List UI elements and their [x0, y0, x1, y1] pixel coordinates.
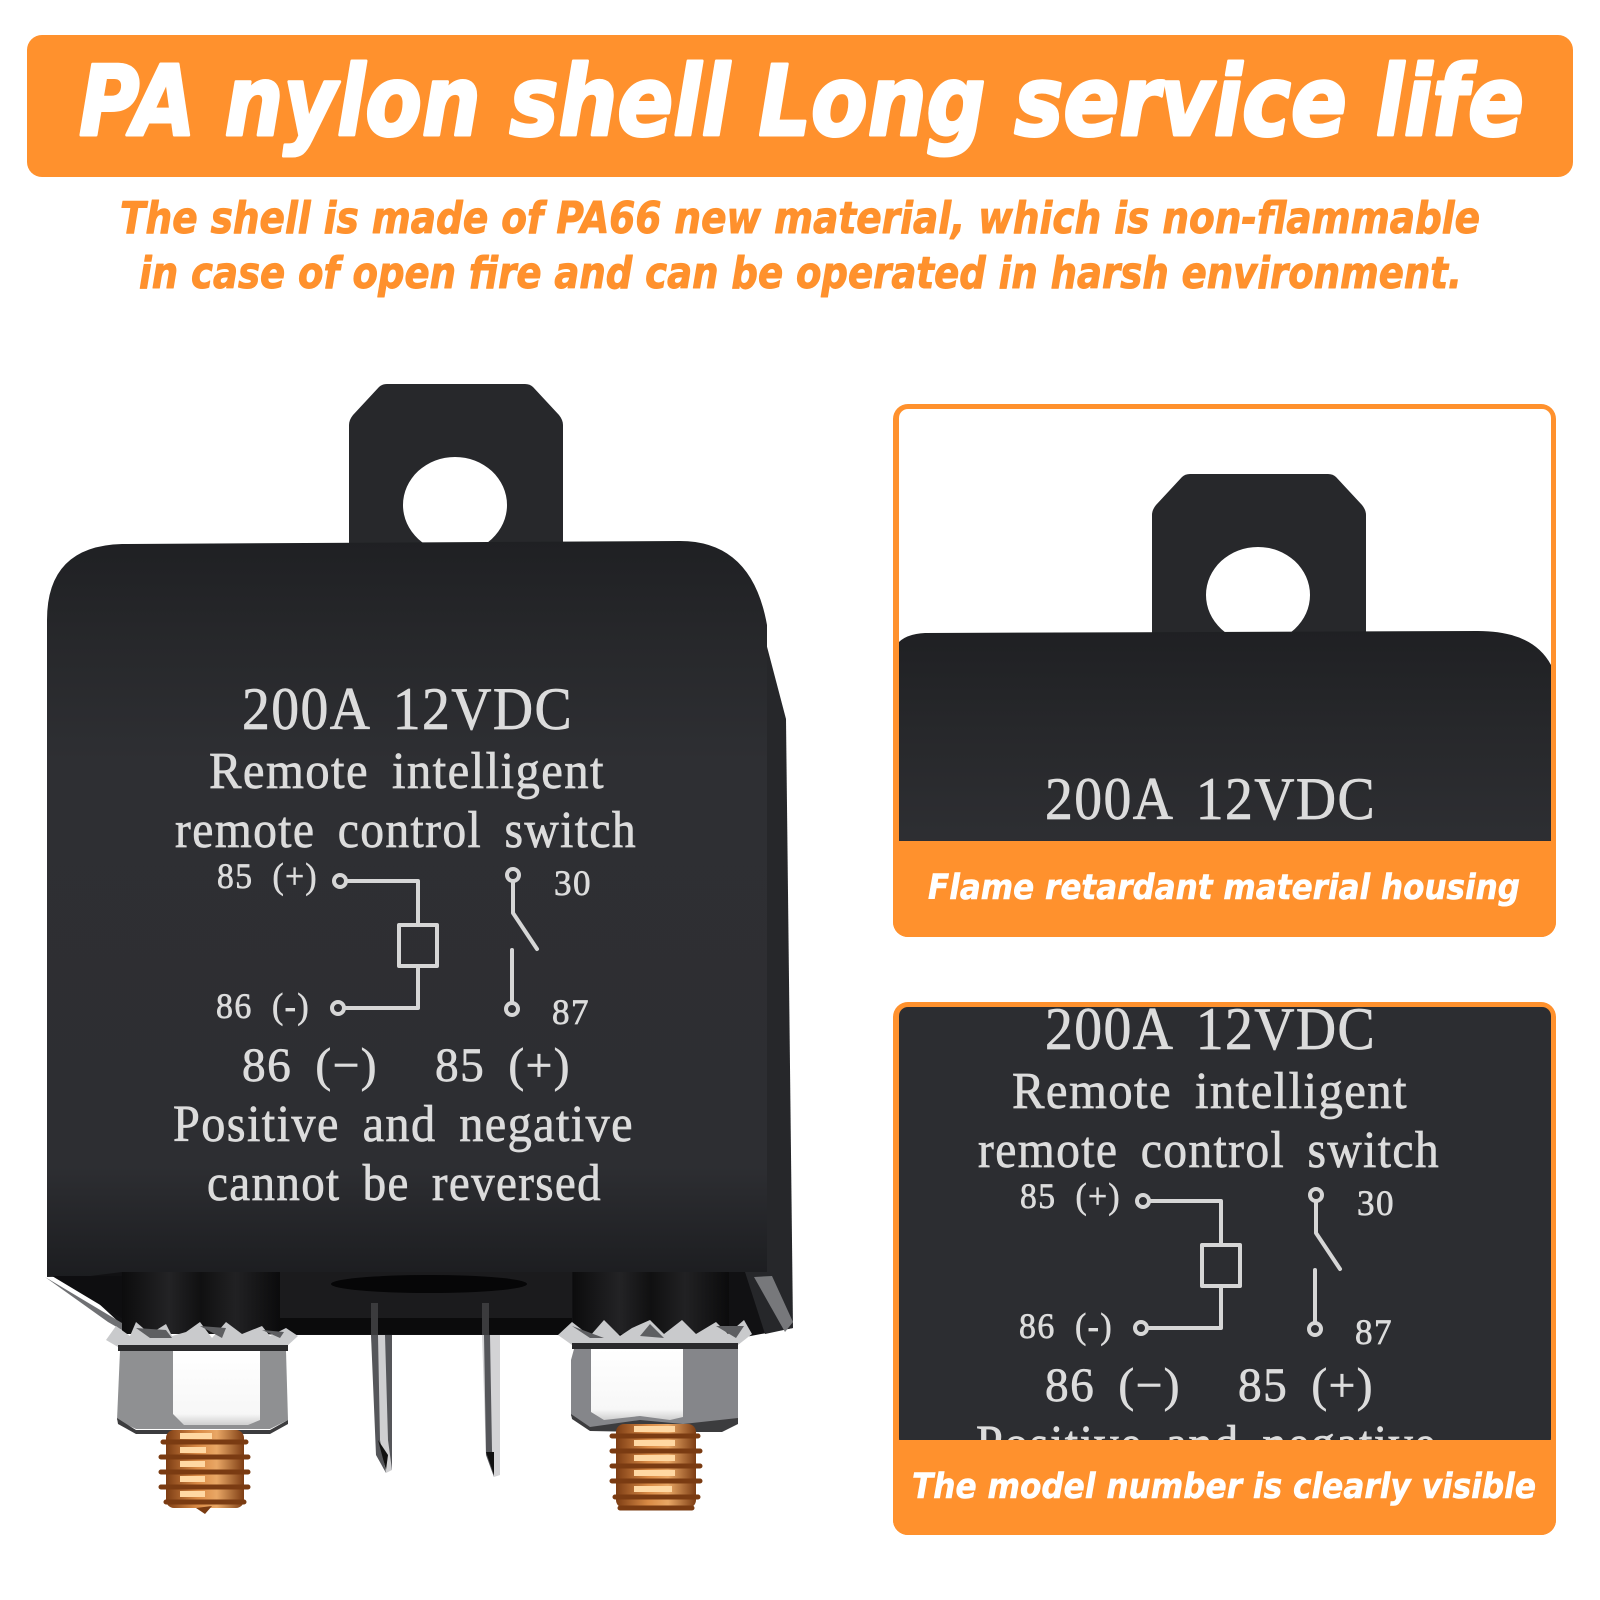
- engraved heading: 200A 12VDC: [242, 676, 573, 742]
- engraved warning: cannot be reversed: [207, 1155, 602, 1212]
- relay close-up: top: [899, 474, 1551, 841]
- side wall: [745, 620, 793, 1334]
- circuit diagram: 87: [552, 992, 590, 1032]
- circuit diagram: [216, 856, 592, 1032]
- underside: [60, 1268, 793, 1338]
- caption text: Flame retardant material housing: [928, 868, 1520, 908]
- relay close-up: engraving: Positive and negative: [976, 1416, 1437, 1473]
- engraved terminal labels: 85 (+): [435, 1039, 571, 1092]
- engraved terminal labels: [242, 1039, 571, 1092]
- caption bar: [893, 1440, 1556, 1535]
- housing front: [47, 541, 767, 1277]
- copper screw: [161, 1430, 248, 1514]
- relay close-up: engraving: 86 (-): [1019, 1306, 1113, 1346]
- relay close-up: engraving: 86 (−): [1045, 1359, 1181, 1412]
- circuit diagram: 86 (-): [216, 986, 310, 1026]
- panel: flame retardant housing: [893, 404, 1556, 937]
- relay close-up: engraving: 30: [1357, 1183, 1395, 1223]
- relay close-up: top: 200A 12VDC: [1045, 766, 1376, 832]
- relay close-up: engraving: 87: [1355, 1312, 1393, 1352]
- engraved warning: Positive and negative: [173, 1096, 634, 1153]
- main relay photo: [45, 384, 793, 1514]
- copper screw: [612, 1424, 700, 1508]
- blade terminal left: [371, 1303, 392, 1473]
- caption text: The model number is clearly visible: [912, 1467, 1536, 1507]
- engraved text: remote intelligent: Remote intelligent: [209, 743, 605, 800]
- relay close-up: top: Remote intelligent: [1012, 833, 1408, 890]
- subtitle: [120, 193, 1480, 299]
- engraved warning: [173, 1096, 634, 1212]
- left post and nut: [106, 1272, 298, 1514]
- mounting tab: [349, 384, 563, 553]
- relay close-up: engraving: [976, 996, 1440, 1473]
- panel: model number: [893, 996, 1556, 1535]
- relay close-up: engraving: 85 (+): [1238, 1359, 1374, 1412]
- circuit diagram: 85 (+): [217, 856, 318, 896]
- right post and nut: [558, 1272, 752, 1508]
- blade terminal right: [482, 1303, 500, 1477]
- relay close-up: engraving: Remote intelligent: [1012, 1063, 1408, 1120]
- circuit diagram: 30: [554, 863, 592, 903]
- engraved terminal labels: 86 (−): [242, 1039, 378, 1092]
- title banner: [27, 35, 1573, 177]
- relay close-up: engraving: 200A 12VDC: [1045, 996, 1376, 1062]
- engraved text: remote control switch: remote control switch: [175, 802, 637, 859]
- caption bar: [893, 841, 1556, 937]
- relay close-up: engraving: 85 (+): [1020, 1176, 1121, 1216]
- relay close-up: engraving: remote control switch: [978, 1122, 1440, 1179]
